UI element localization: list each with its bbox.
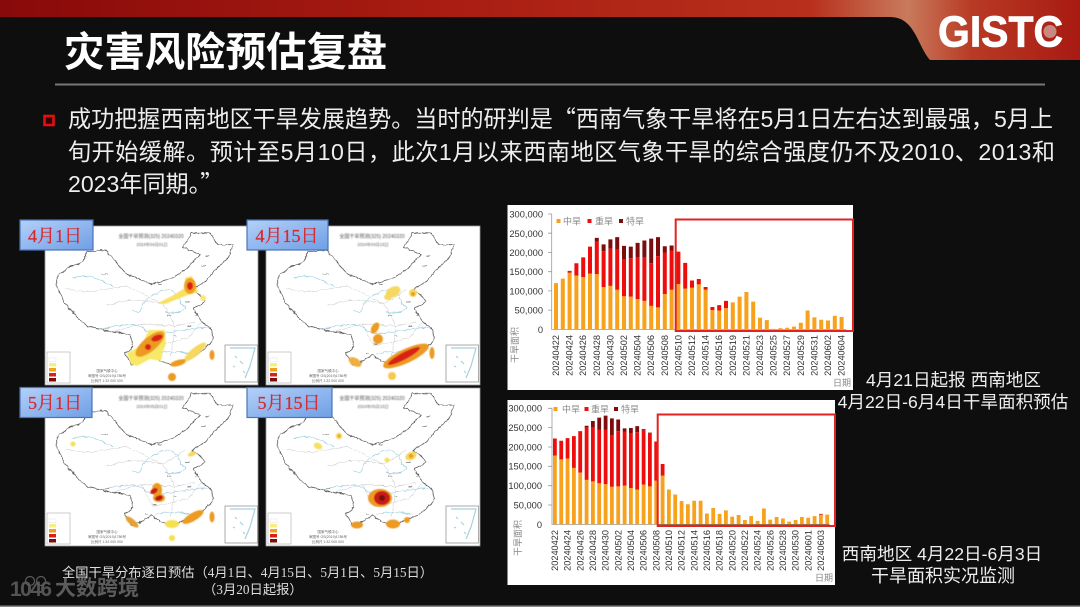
chart: forecast drought area [508, 205, 853, 390]
date labels: 20240512 [677, 530, 687, 571]
date labels: 20240504 [633, 335, 643, 376]
y axis labels: 200,000 [508, 442, 542, 452]
date labels: 20240529 [796, 335, 806, 376]
date labels: 20240528 [778, 530, 788, 571]
date labels: 20240502 [619, 335, 629, 376]
date tag: 5月15日 [247, 388, 332, 418]
date labels: 20240516 [714, 335, 724, 376]
header band [0, 0, 1080, 60]
body text: 旬开始缓解。预计至5月10日，此次1月以来西南地区气象干旱的综合强度仍不及2010、2013和 [68, 139, 1055, 165]
chart: forecast drought area: 日期 [833, 378, 851, 388]
legend: 特旱 [621, 404, 639, 414]
date labels: 20240518 [715, 530, 725, 571]
date labels: 20240604 [837, 335, 847, 376]
date labels: 20240512 [687, 335, 697, 376]
date labels: 20240520 [727, 530, 737, 571]
title rule [55, 84, 1045, 86]
panel: drought map May 15: 全国干旱预测(325) 20240320 [339, 395, 405, 402]
y axis labels: 150,000 [508, 462, 542, 472]
logo: GISTC: GISTC [938, 8, 1063, 56]
date labels: 20240428 [588, 530, 598, 571]
monitoring chart note [842, 544, 1042, 586]
bottom edge [0, 606, 1080, 607]
legend: 重旱 [595, 216, 613, 226]
panel: drought map April 15: 全国干旱预测(325) 20240320 [339, 233, 405, 240]
bullet icon [44, 116, 54, 125]
date labels: 20240422 [550, 530, 560, 571]
y axis labels: 250,000 [509, 229, 543, 239]
legend: 中旱 [563, 216, 581, 226]
legend [556, 216, 644, 226]
body text: 2023年同期。” [68, 165, 223, 199]
date labels: 20240506 [646, 335, 656, 376]
y axis labels: 200,000 [509, 248, 543, 258]
y axis labels: 100,000 [508, 481, 542, 491]
date labels: 20240424 [563, 530, 573, 571]
date labels: 20240531 [809, 335, 819, 376]
monitoring chart note: 西南地区 4月22日-6月3日 [842, 544, 1042, 564]
watermark [10, 576, 139, 601]
panel: drought map May 15 [266, 388, 480, 546]
date labels: 20240530 [791, 530, 801, 571]
forecast chart note: 4月22日-6月4日干旱面积预估 [838, 392, 1068, 412]
date labels: 20240428 [592, 335, 602, 376]
legend: 重旱 [591, 404, 609, 414]
y axis labels: 300,000 [508, 404, 542, 414]
body text: 成功把握西南地区干旱发展趋势。当时的研判是“西南气象干旱将在5月1日左右达到最强，5月上 [68, 100, 1053, 134]
panel: drought map April 1: 全国干旱预测(325) 20240320 [118, 233, 184, 240]
map caption: 全国干旱分布逐日预估（4月1日、4月15日、5月1日、5月15日） [62, 564, 433, 580]
highlight box [658, 414, 835, 526]
date tag: 5月1日: 5月1日 [28, 393, 82, 413]
date labels: 20240521 [741, 335, 751, 376]
date labels: 20240603 [816, 530, 826, 571]
date tag: 5月1日 [20, 388, 92, 418]
date labels: 20240523 [755, 335, 765, 376]
date labels: 20240522 [740, 530, 750, 571]
date labels: 20240601 [803, 530, 813, 571]
y axis labels: 0 [537, 520, 542, 530]
map caption: （3月20日起报） [203, 582, 303, 597]
map caption [62, 564, 433, 597]
date labels: 20240508 [651, 530, 661, 571]
legend [554, 404, 639, 414]
y axis labels: 300,000 [509, 210, 543, 220]
monitoring chart note: 干旱面积实况监测 [871, 566, 1015, 586]
date labels: 20240424 [565, 335, 575, 376]
panel: drought map May 1 [45, 388, 258, 546]
date labels: 20240510 [673, 335, 683, 376]
chart: monitored drought area: 干旱面积 [512, 520, 523, 556]
panel: drought map April 1: 2024年04月01日 [136, 241, 168, 248]
date labels: 20240525 [769, 335, 779, 376]
highlight box [676, 220, 853, 331]
date labels: 20240510 [664, 530, 674, 571]
date tag: 4月1日: 4月1日 [28, 226, 82, 246]
watermark: 大数跨境 [55, 577, 139, 600]
date labels: 20240516 [702, 530, 712, 571]
watermark: 1046 [10, 578, 52, 601]
y axis labels: 50,000 [514, 500, 542, 510]
forecast chart note: 4月21日起报 西南地区 [866, 370, 1041, 390]
panel: drought map May 1: 全国干旱预测(325) 20240320 [118, 395, 184, 402]
chart: monitored drought area [508, 400, 835, 585]
y axis labels [508, 404, 542, 530]
date labels: 20240514 [689, 530, 699, 571]
chart: monitored drought area: 日期 [815, 573, 833, 583]
date labels [550, 530, 826, 571]
y axis labels: 250,000 [508, 423, 542, 433]
panel: drought map April 15 [266, 226, 480, 385]
panel: drought map May 1: 2024年05月01日 [136, 403, 168, 410]
date tag: 4月15日: 4月15日 [256, 226, 318, 246]
legend: 特旱 [626, 216, 644, 226]
legend: 中旱 [562, 404, 580, 414]
date labels: 20240502 [613, 530, 623, 571]
date tag: 4月1日 [20, 220, 93, 250]
date tag: 4月15日 [247, 220, 328, 250]
panel: drought map April 1 [45, 226, 258, 385]
y axis labels: 0 [538, 325, 543, 335]
date labels: 20240422 [551, 335, 561, 376]
stacked bars [554, 237, 844, 329]
date labels: 20240506 [639, 530, 649, 571]
chart: forecast drought area: 干旱面积 [509, 327, 520, 363]
date labels: 20240426 [575, 530, 585, 571]
stacked bars [553, 416, 829, 524]
date labels: 20240519 [728, 335, 738, 376]
forecast chart note [838, 370, 1068, 412]
date labels: 20240426 [578, 335, 588, 376]
date labels: 20240508 [660, 335, 670, 376]
date labels [551, 335, 847, 376]
date labels: 20240514 [701, 335, 711, 376]
date labels: 20240527 [782, 335, 792, 376]
y axis labels: 150,000 [509, 267, 543, 277]
date labels: 20240602 [823, 335, 833, 376]
date tag: 5月15日: 5月15日 [258, 393, 320, 413]
body text [68, 100, 1055, 199]
date labels: 20240430 [601, 530, 611, 571]
y axis labels: 100,000 [509, 286, 543, 296]
y axis labels: 50,000 [515, 306, 543, 316]
panel: drought map May 15: 2024年05月15日 [357, 403, 389, 410]
date labels: 20240526 [765, 530, 775, 571]
date labels: 20240504 [626, 530, 636, 571]
date labels: 20240430 [605, 335, 615, 376]
panel: drought map April 15: 2024年04月15日 [357, 241, 389, 248]
title: 灾害风险预估复盘 [64, 29, 387, 75]
y axis labels [509, 210, 543, 335]
date labels: 20240524 [753, 530, 763, 571]
